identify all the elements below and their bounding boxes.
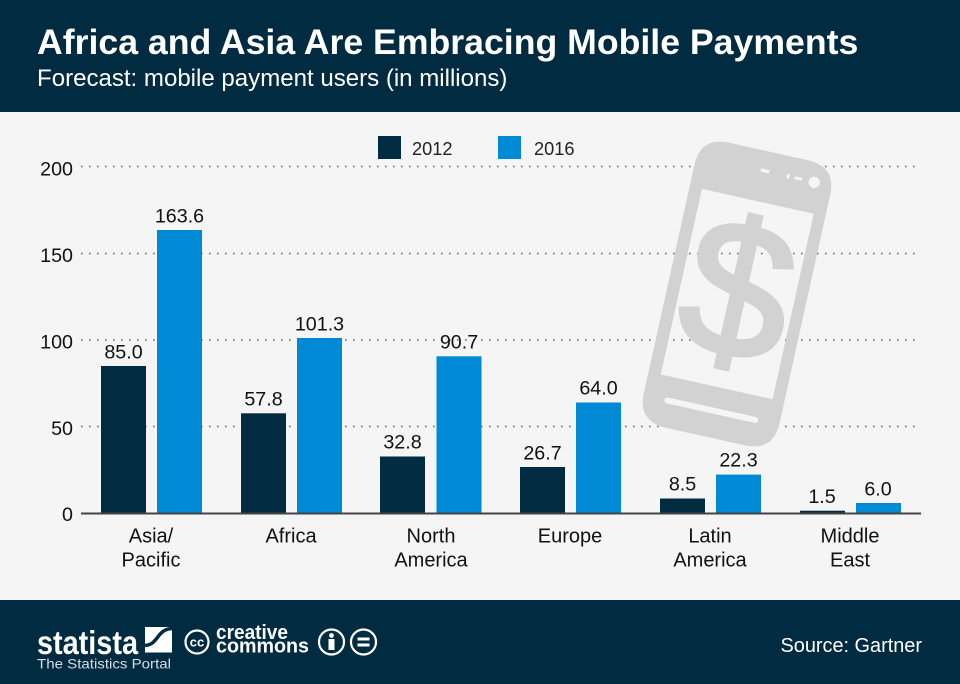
bars: North America: 32.8 — [383, 432, 422, 454]
x axis labels: Pacific — [122, 550, 180, 572]
bars: Africa: 57.8 — [244, 388, 283, 410]
y axis labels: 100 — [40, 332, 73, 354]
x axis labels: Latin — [688, 526, 732, 548]
legend: 2012 — [378, 136, 452, 159]
bar chart — [101, 206, 901, 513]
source: Source: Gartner — [780, 635, 922, 657]
y axis labels: 200 — [40, 158, 73, 180]
bars: Asia/Pacific: 85.0 — [104, 342, 143, 364]
bars: Latin America: 8.5 — [669, 474, 696, 496]
creative commons logo: cc — [190, 634, 204, 650]
x axis labels: America — [673, 550, 748, 572]
bars: Middle East: 6.0 — [864, 478, 892, 500]
bars: Europe — [520, 378, 621, 513]
statista logo: statista — [37, 624, 139, 661]
creative commons logo: creative — [216, 622, 288, 644]
title: Africa and Asia Are Embracing Mobile Payments — [37, 22, 858, 62]
subtitle: Forecast: mobile payment users (in millions) — [37, 65, 507, 92]
bars: Europe: 26.7 — [523, 442, 562, 464]
icon: attribution — [319, 630, 344, 654]
bars: Africa: 101.3 — [295, 314, 344, 336]
bars: Europe: 64.0 — [579, 378, 618, 400]
bars: Asia/Pacific — [101, 206, 204, 513]
icon: no derivatives — [351, 630, 376, 654]
x axis labels: Europe — [538, 526, 602, 548]
bars: Asia/Pacific: 163.6 — [155, 206, 204, 228]
icon: phone with dollar sign — [638, 136, 836, 452]
y axis labels: 150 — [40, 245, 73, 267]
statista logo — [37, 624, 173, 672]
x axis labels: America — [394, 550, 469, 572]
bars: Latin America: 22.3 — [719, 450, 758, 472]
header band — [0, 0, 960, 112]
x axis labels: Asia/ — [129, 526, 174, 548]
bars: Latin America — [660, 450, 761, 513]
creative commons logo — [186, 622, 309, 658]
x axis labels — [122, 526, 879, 572]
creative commons logo: commons — [216, 636, 309, 658]
icon: phone with dollar sign: $ — [663, 173, 813, 406]
x axis labels: North — [407, 526, 455, 548]
y axis labels: 0 — [62, 504, 73, 526]
x axis labels: East — [830, 550, 870, 572]
legend: 2016 — [498, 136, 574, 159]
bars: Middle East — [800, 478, 901, 513]
statista logo: The Statistics Portal — [37, 656, 171, 672]
y axis labels — [40, 158, 73, 526]
bars: Africa — [241, 314, 344, 513]
legend: 2016: 2016 — [534, 139, 574, 159]
x axis labels: Middle — [821, 526, 879, 548]
y axis labels: 50 — [51, 418, 73, 440]
legend: 2012: 2012 — [412, 139, 452, 159]
bars: North America — [380, 332, 482, 513]
legend — [378, 136, 574, 159]
x axis line — [81, 512, 921, 514]
x axis labels: Africa — [265, 526, 317, 548]
bars: North America: 90.7 — [440, 332, 478, 354]
footer band — [0, 600, 960, 684]
gridlines — [81, 166, 920, 426]
bars: Middle East: 1.5 — [808, 486, 836, 508]
